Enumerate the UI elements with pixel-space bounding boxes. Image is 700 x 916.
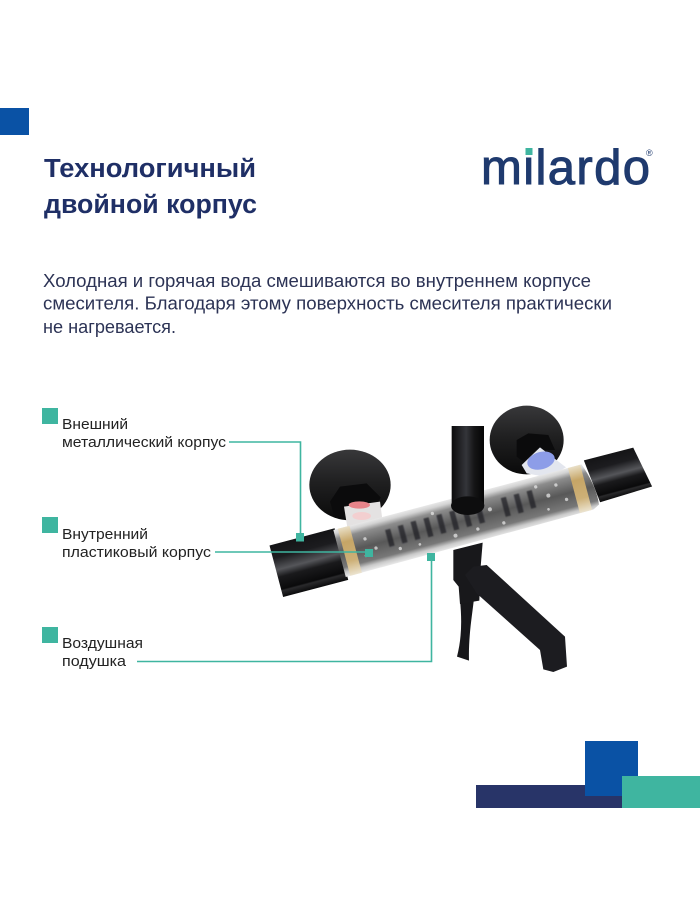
callout: outer metal body: металлический корпус	[62, 435, 227, 451]
main tube	[269, 445, 655, 597]
transparent tube	[333, 463, 601, 577]
right brass ring	[568, 465, 592, 513]
title: Технологичный	[44, 155, 256, 183]
intro text: не нагревается.	[43, 316, 176, 337]
callout: inner plastic body	[42, 517, 373, 561]
callout: outer metal body	[42, 408, 304, 542]
intro text: Холодная и горячая вода смешиваются во внутреннем корпусе	[43, 270, 591, 291]
vertical shower pipe	[451, 426, 484, 515]
callout: air cushion: подушка	[62, 654, 127, 670]
left brass ring	[338, 526, 362, 576]
callout: outer metal body: Внешний	[62, 417, 128, 433]
logo: milardo: ®	[646, 148, 653, 158]
callout: air cushion	[42, 553, 435, 670]
air bubbles	[358, 477, 570, 561]
inner cartridge fins	[385, 490, 537, 548]
intro text: смесителя. Благодаря этому поверхность смесителя практически	[43, 292, 612, 314]
intro text	[43, 270, 612, 337]
title: двойной корпус	[44, 191, 257, 219]
right knob	[490, 406, 566, 477]
title	[44, 155, 257, 219]
callout: air cushion: Воздушная	[62, 636, 143, 652]
right metal cap	[584, 445, 653, 504]
decorative blocks: bottom right	[476, 741, 700, 808]
faucet illustration	[269, 406, 655, 672]
spout, lower body and hose	[453, 543, 567, 672]
callout: inner plastic body: Внутренний	[62, 527, 148, 543]
callout: inner plastic body: пластиковый корпус	[62, 545, 212, 561]
logo: milardo: milardo	[481, 141, 650, 195]
corner accent square	[0, 108, 29, 135]
left metal cap	[270, 528, 348, 597]
left knob	[309, 450, 391, 527]
